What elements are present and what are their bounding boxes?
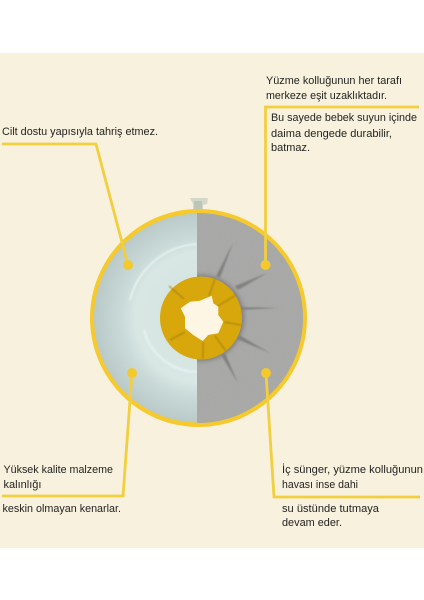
leader line — [266, 107, 419, 265]
foam half: grey sponge with spokes — [197, 213, 303, 423]
callout text: kalınlığı — [4, 479, 42, 491]
centre hole — [181, 296, 223, 341]
callout text: su üstünde tutmaya — [282, 503, 380, 515]
callout text: Yüksek kalite malzeme — [4, 464, 113, 476]
leader line — [2, 144, 128, 265]
callout text: Bu sayede bebek suyun içinde — [271, 112, 417, 124]
callout text: devam eder. — [282, 517, 342, 529]
callout text: havası inse dahi — [282, 479, 358, 491]
yellow inner foam donut — [160, 276, 242, 360]
inflated half: pale tube — [94, 214, 197, 422]
callout text — [2, 464, 121, 515]
marker dot — [123, 260, 133, 270]
callout: material thickness — [2, 368, 137, 515]
callout text: batmaz. — [271, 142, 310, 154]
callout text: merkeze eşit uzaklıktadır. — [266, 90, 387, 102]
callout: skin friendly — [2, 126, 158, 270]
callout text — [282, 463, 423, 529]
callout: equal distance — [260, 75, 419, 270]
callout text: Cilt dostu yapısıyla tahriş etmez. — [2, 126, 158, 138]
callout text: İç sünger, yüzme kolluğunun — [282, 463, 423, 476]
callout text: Yüzme kolluğunun her tarafı — [266, 75, 402, 87]
product illustration: swim ring cross-section — [90, 198, 307, 427]
marker dot — [127, 368, 137, 378]
marker dot — [261, 368, 271, 378]
leader line — [2, 373, 132, 496]
valve — [190, 198, 208, 212]
callout text: daima dengede durabilir, — [271, 128, 392, 140]
leader line — [266, 373, 420, 497]
callout text: keskin olmayan kenarlar. — [2, 503, 121, 515]
yellow outer ring — [90, 209, 307, 427]
callout: inner sponge — [261, 368, 423, 529]
callout text — [266, 75, 417, 154]
marker dot — [260, 260, 270, 270]
